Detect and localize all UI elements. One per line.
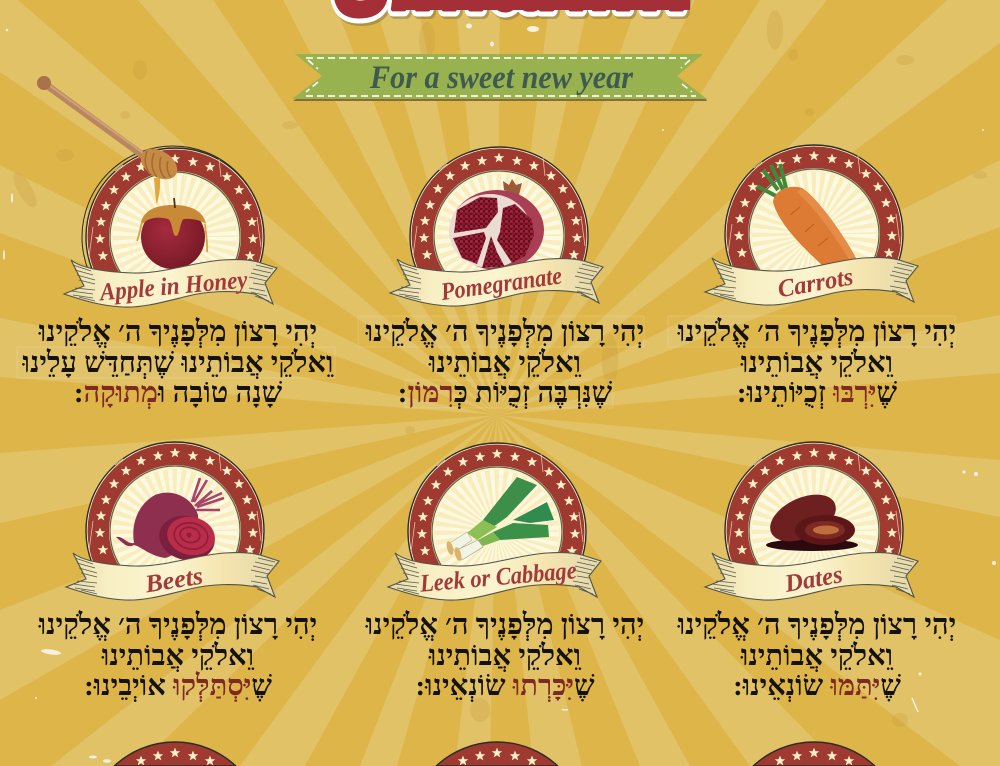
- blessing: pomegranate: וֵאלֹקֵי אֲבוֹתֵינוּ: [429, 346, 581, 378]
- blessing: apple in honey: שָׁנָה טוֹבָה וּמְתוּקָה:: [74, 377, 282, 409]
- subtitle banner: [292, 54, 707, 101]
- label: Beets: [142, 563, 205, 599]
- icon: dates: [763, 485, 858, 551]
- label: Carrots: [776, 263, 855, 303]
- label: Dates: [782, 561, 845, 598]
- subtitle text: For a sweet new year: [369, 60, 634, 96]
- title: [334, 0, 694, 43]
- blessing: leek or cabbage: וֵאלֹקֵי אֲבוֹתֵינוּ: [429, 640, 581, 672]
- icon: honey dipper: [37, 76, 183, 205]
- badge: bottom centre (cropped): [436, 742, 558, 766]
- label: Leek or Cabbage: [418, 557, 578, 598]
- blessing: apple in honey: וֵאלֹקֵי אֲבוֹתֵינוּ שֶׁתְּחַדֵּשׁ עָלֵינוּ: [23, 346, 333, 378]
- icon: pomegranate: [449, 179, 544, 270]
- badge: bottom left (cropped): [114, 742, 236, 766]
- blessing: apple in honey: [22, 317, 334, 409]
- blessing: leek or cabbage: שֶׁיִּכָּרְתוּ שׂוֹנְאֵינוּ:: [415, 670, 595, 702]
- badge: bottom right (cropped): [753, 742, 875, 766]
- blessing: carrots: וֵאלֹקֵי אֲבוֹתֵינוּ: [741, 346, 893, 378]
- badge: pomegranate: [390, 147, 603, 325]
- icon: carrot: [757, 164, 858, 265]
- blessing: carrots: [677, 317, 956, 409]
- blessing: beets: וֵאלֹקֵי אֲבוֹתֵינוּ: [102, 640, 254, 672]
- blessing: beets: [38, 610, 317, 702]
- label: Pomegranate: [438, 262, 564, 306]
- blessing: dates: [677, 610, 956, 702]
- blessing: beets: שֶׁיִּסְתַּלְּקוּ אוֹיְבֵינוּ:: [84, 670, 272, 702]
- badge: dates: [705, 442, 918, 620]
- blessing: leek or cabbage: [365, 610, 644, 702]
- blessing: dates: וֵאלֹקֵי אֲבוֹתֵינוּ: [741, 640, 893, 672]
- badge: apple in honey: [37, 76, 277, 328]
- faint text boxes: [17, 316, 955, 408]
- label: Apple in Honey: [97, 267, 249, 307]
- blessing: pomegranate: [365, 317, 644, 409]
- blessing: pomegranate: שֶׁנִּרְבֶּה זְכֻיּוֹת כְּרִמּוֹן:: [398, 377, 612, 409]
- icon: beet: [116, 478, 224, 565]
- badge: leek or cabbage: [388, 443, 601, 621]
- badge: carrots: [705, 145, 918, 323]
- blessing: dates: שֶׁיִּתַּמּוּ שׂוֹנְאֵינוּ:: [733, 670, 901, 702]
- badge: beets: [66, 442, 279, 620]
- icon: leek: [445, 477, 554, 562]
- blessing: carrots: שֶׁיִּרְבּוּ זְכֻיּוֹתֵינוּ:: [737, 377, 897, 409]
- icon: apple: [137, 198, 207, 269]
